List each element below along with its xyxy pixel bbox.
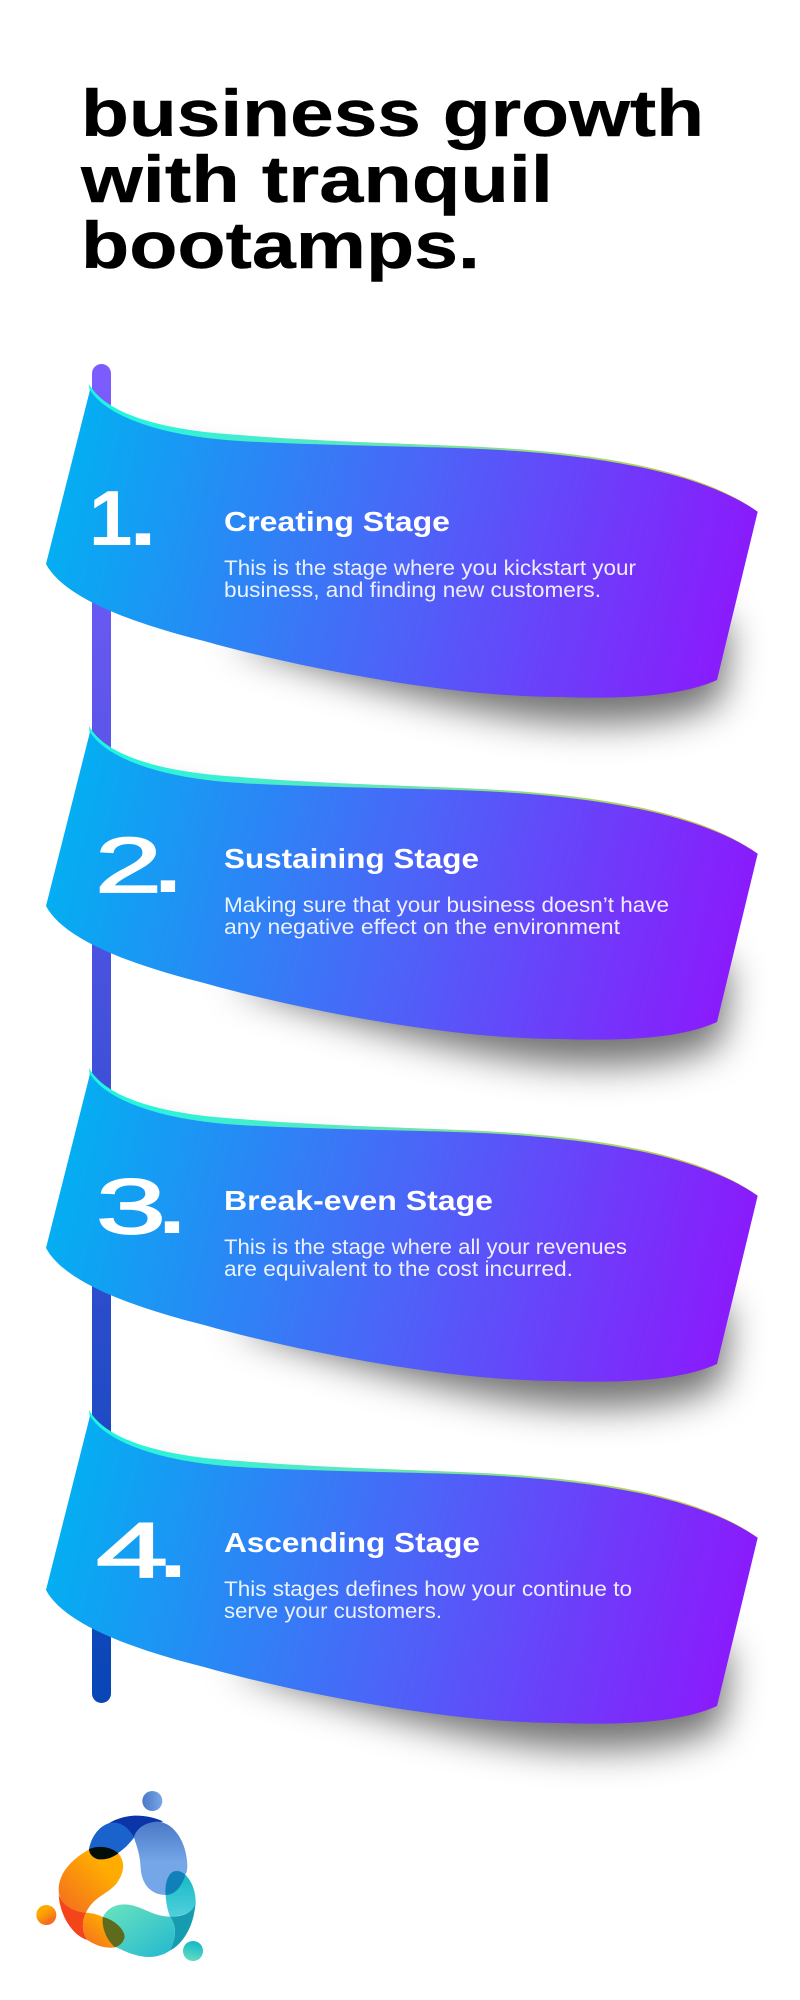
banner 4: ascending stage: 4 [96, 1506, 168, 1594]
banner 4: ascending stage: . [159, 1506, 187, 1594]
banner 3: break-even stage: are equivalent to the cost incurred. [224, 1257, 573, 1281]
banner shadows [150, 425, 730, 1749]
banner 2: sustaining stage [46, 726, 758, 1040]
banner 4: ascending stage [46, 1410, 758, 1724]
title: with tranquil [80, 142, 553, 216]
banner 3: break-even stage: This is the stage where all your revenues [224, 1235, 627, 1259]
title: bootamps. [81, 208, 480, 282]
banner 1: creating stage [46, 384, 758, 698]
title [80, 76, 704, 282]
banner 1: creating stage: Creating Stage [224, 506, 450, 537]
banner 2: sustaining stage: Sustaining Stage [224, 843, 479, 874]
title: business growth [81, 76, 704, 150]
vertical pole [92, 364, 111, 1703]
banner 1: creating stage: business, and finding new customers. [224, 578, 601, 602]
banner 2: sustaining stage: any negative effect on the environment [224, 915, 620, 939]
banner 3: break-even stage: 3 [96, 1162, 166, 1250]
banner 4: ascending stage: This stages defines how your continue to [224, 1577, 632, 1601]
banner 4: ascending stage: Ascending Stage [224, 1527, 480, 1558]
banner 2: sustaining stage: . [154, 821, 182, 909]
banner 2: sustaining stage: Making sure that your business doesn’t have [224, 893, 669, 917]
banner 2: sustaining stage: 2 [95, 821, 162, 909]
banner 3: break-even stage: . [158, 1162, 186, 1250]
banner 1: creating stage: 1 [89, 474, 132, 562]
banner 1: creating stage: This is the stage where you kickstart your [224, 556, 636, 580]
banner 3: break-even stage: Break-even Stage [224, 1185, 493, 1216]
banner 1: creating stage: . [129, 474, 157, 562]
logo [36, 1791, 203, 1961]
banner 3: break-even stage [46, 1068, 758, 1382]
banner 4: ascending stage: serve your customers. [224, 1599, 442, 1623]
